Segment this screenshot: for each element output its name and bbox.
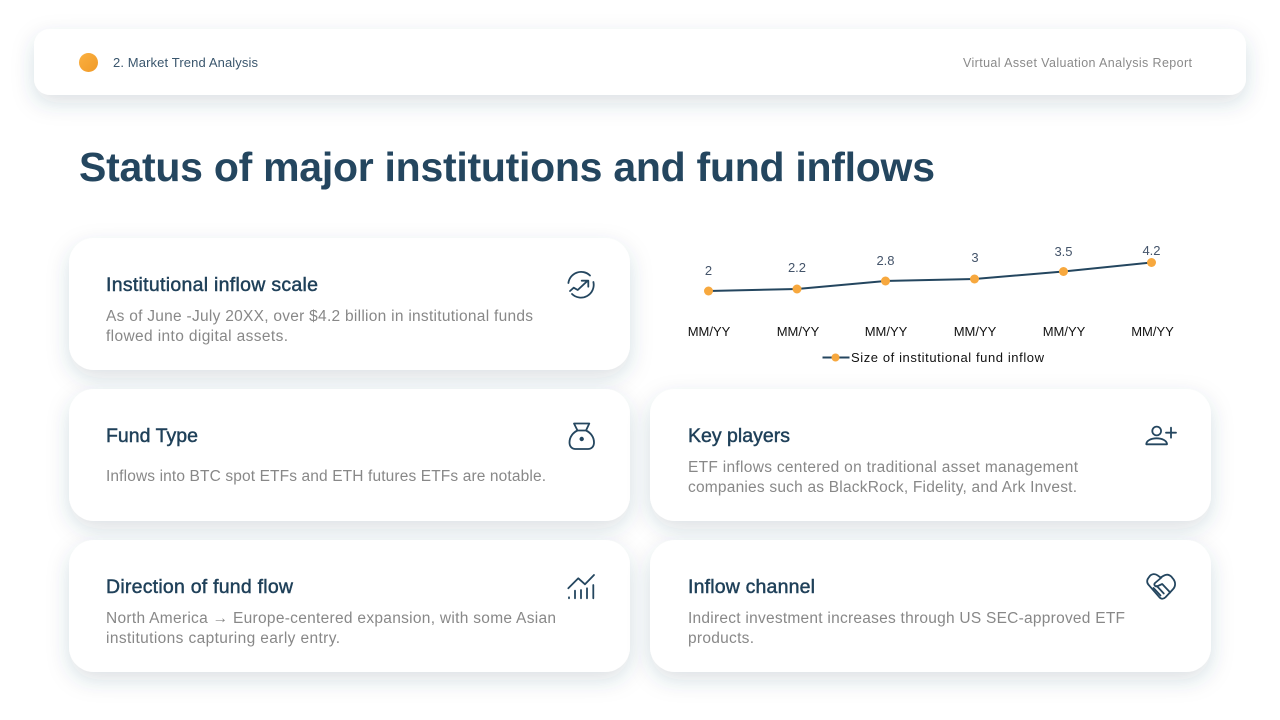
- data labels: 2: [705, 263, 712, 278]
- body text: companies such as BlackRock, Fidelity, and Ark Invest.: [688, 479, 1077, 496]
- legend: Size of institutional fund inflow: [851, 350, 1045, 365]
- body text: Indirect investment increases through US SEC-approved ETF: [688, 610, 1125, 627]
- title: Status of major institutions and fund inflows: [79, 144, 935, 190]
- data labels: 3: [971, 250, 979, 265]
- x axis labels: MM/YY: [865, 324, 908, 339]
- section label: 2. Market Trend Analysis: [113, 55, 258, 70]
- data labels: 2.2: [788, 260, 806, 275]
- line chart: [688, 243, 1174, 365]
- x axis labels: [688, 324, 1174, 339]
- body text: [688, 459, 1079, 496]
- x axis labels: MM/YY: [777, 324, 820, 339]
- heading: Fund Type: [106, 425, 198, 447]
- body text: ETF inflows centered on traditional asset management: [688, 459, 1079, 476]
- icon: orange dot: [79, 53, 98, 72]
- icon: money bag: [570, 424, 594, 449]
- body text: As of June -July 20XX, over $4.2 billion in institutional funds: [106, 308, 533, 325]
- body text: [106, 308, 533, 345]
- x axis labels: MM/YY: [954, 324, 997, 339]
- data labels: 2.8: [876, 253, 895, 268]
- body text: [688, 610, 1125, 647]
- body text: institutions capturing early entry.: [106, 630, 340, 647]
- panel: inflow channel: [650, 540, 1211, 672]
- heading: Institutional inflow scale: [106, 274, 318, 296]
- heading: Inflow channel: [688, 576, 815, 598]
- heading: Direction of fund flow: [106, 576, 294, 598]
- trend line: [708, 262, 1152, 291]
- panel: key players: [650, 389, 1211, 521]
- body text: flowed into digital assets.: [106, 328, 288, 345]
- data labels: 4.2: [1142, 243, 1161, 258]
- report name: Virtual Asset Valuation Analysis Report: [963, 56, 1193, 70]
- panel: institutional inflow scale: [69, 238, 630, 370]
- icon: growth arrow in circle: [568, 272, 594, 298]
- body text: products.: [688, 630, 754, 647]
- body text: Inflows into BTC spot ETFs and ETH futures ETFs are notable.: [106, 468, 546, 485]
- data labels: [705, 243, 1161, 278]
- heading: Key players: [688, 425, 790, 447]
- data labels: 3.5: [1054, 244, 1073, 259]
- icon: handshake: [1147, 574, 1175, 599]
- panel: direction of fund flow: [69, 540, 630, 672]
- body text: [106, 610, 556, 647]
- header bar: [34, 29, 1246, 95]
- x axis labels: MM/YY: [1043, 324, 1086, 339]
- icon: bars and trend line: [568, 575, 594, 598]
- body text: North America → Europe-centered expansion, with some Asian: [106, 610, 556, 627]
- data points: [704, 258, 1156, 296]
- panel: fund type: [69, 389, 630, 521]
- x axis labels: MM/YY: [688, 324, 731, 339]
- x axis labels: MM/YY: [1131, 324, 1174, 339]
- icon: add person: [1146, 427, 1176, 444]
